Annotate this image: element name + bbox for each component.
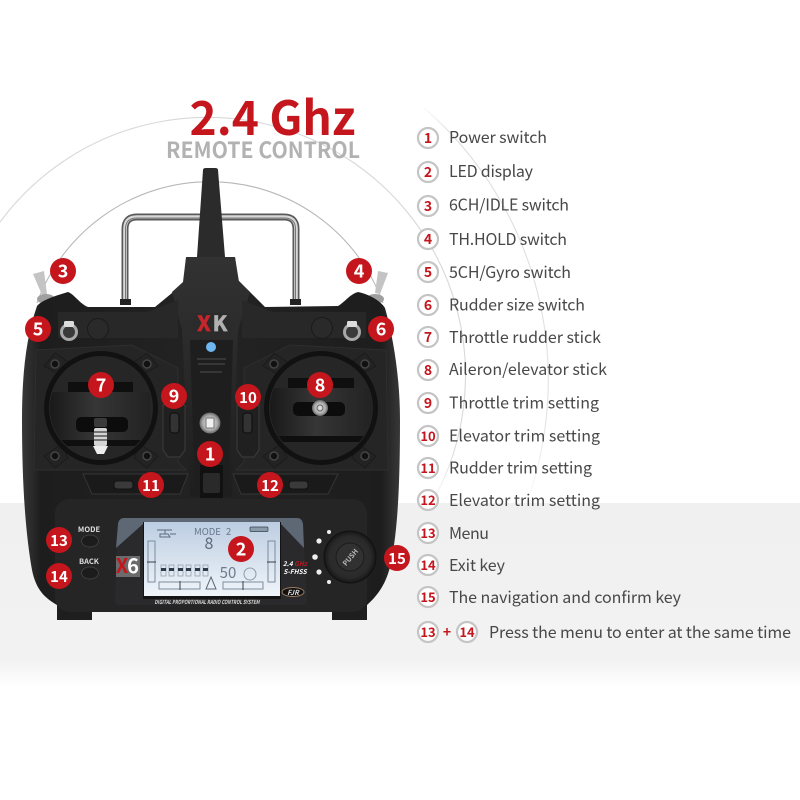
mode button: [78, 524, 100, 547]
FJR logo: FJR: [287, 588, 300, 598]
digit 8: 8: [205, 530, 214, 554]
badge 11: 11: [142, 475, 160, 496]
badge 7: [88, 372, 114, 398]
gimbal screws: [51, 360, 369, 460]
XK logo: [191, 308, 232, 338]
frequency logo: 2.4 GHz: [283, 558, 309, 568]
legend 14: Exit key: [449, 552, 506, 576]
back button: [79, 556, 100, 579]
transmitter body: [22, 257, 400, 620]
legend 2: LED display: [449, 158, 534, 182]
round buttons on deck: [88, 318, 332, 340]
legend 3: 3: [424, 196, 432, 216]
badge 10: [235, 384, 261, 410]
badge 3: [50, 258, 76, 284]
legend 6: Rudder size switch: [449, 292, 585, 316]
channel bars: [161, 565, 208, 576]
FJR logo: [282, 588, 304, 598]
panel caption: DIGITAL PROPORTIONAL RADIO CONTROL SYSTEM: [154, 598, 260, 606]
legend 12: 12: [420, 490, 436, 509]
legend 10: Elevator trim setting: [449, 422, 600, 446]
legend 4: 4: [424, 229, 432, 249]
frequency logo: [283, 558, 309, 576]
badge 12: 12: [261, 475, 279, 496]
LCD screen: [144, 522, 280, 596]
badge 11: [138, 472, 164, 498]
badge 14: [46, 563, 72, 589]
legend 8: Aileron/elevator stick: [449, 356, 607, 380]
upper deck: [58, 300, 366, 338]
X6 badge: [116, 550, 140, 579]
battery icon: [250, 527, 268, 532]
speaker grille: [197, 359, 226, 372]
background panel: grey floor band: [0, 503, 800, 687]
badge 2: [228, 536, 254, 562]
toggle switch right: [343, 321, 361, 341]
X6 badge: X: [116, 550, 129, 579]
chrome carry handle: [120, 217, 301, 303]
power LED: [206, 342, 216, 352]
navigation dial: [324, 531, 376, 583]
XK logo: K: [213, 308, 228, 338]
right toggle lever: [366, 271, 388, 304]
XK logo: X: [197, 308, 211, 338]
badge 5: 5: [33, 316, 43, 342]
power slide: [200, 465, 223, 498]
antenna: [197, 168, 225, 257]
remote control transmitter: [22, 168, 400, 620]
legend 13: Menu: [449, 520, 489, 544]
badge 10: 10: [239, 387, 257, 408]
horizontal trim slots: [83, 474, 338, 494]
legend 11: Rudder trim setting: [449, 454, 592, 478]
legend 13 + 14: 14: [459, 622, 475, 641]
badge 7: 7: [96, 372, 106, 398]
trim bars: [159, 581, 263, 590]
frequency logo: S-FHSS: [283, 566, 308, 576]
legend 1: Power switch: [449, 124, 547, 148]
shoulder panels: [34, 345, 388, 470]
numbered badges on the remote: [25, 258, 410, 589]
legend 8: 8: [424, 360, 432, 380]
legend 13 + 14: +: [443, 622, 451, 642]
badge 2: 2: [236, 536, 246, 562]
side bar gauges: [147, 541, 276, 582]
legend 5: 5: [424, 262, 432, 282]
legend 4: TH.HOLD switch: [449, 226, 567, 250]
value 50: 50: [220, 562, 236, 583]
legend 13: 13: [420, 523, 436, 542]
navigation dial: PUSH: [341, 547, 361, 568]
mode text: 2: [226, 524, 231, 538]
badge 13: [46, 527, 72, 553]
badge 8: 8: [315, 372, 325, 398]
legend 15: 15: [420, 587, 436, 606]
badge 15: [384, 545, 410, 571]
badge 13: 13: [50, 530, 68, 551]
badge 4: 4: [354, 258, 365, 284]
dial indicator dots: [312, 530, 331, 584]
decorative signal arcs: [0, 107, 548, 515]
badge 8: [307, 372, 333, 398]
right gimbal: [264, 351, 378, 465]
back button: BACK: [79, 556, 100, 567]
left toggle lever: [33, 271, 55, 304]
legend list: [418, 124, 791, 643]
title: 2.4 Ghz: 2.4 Ghz: [190, 80, 356, 149]
left gimbal: [44, 351, 158, 465]
badge 1: 1: [205, 440, 215, 466]
badge 12: [257, 472, 283, 498]
badge 1: [197, 440, 223, 467]
badge 15: 15: [388, 548, 406, 569]
badge 3: 3: [58, 258, 68, 284]
right stick knob: [312, 400, 328, 416]
badge 6: [368, 316, 394, 342]
head block: [172, 257, 250, 497]
legend 15: The navigation and confirm key: [449, 584, 682, 608]
legend 10: 10: [420, 426, 436, 445]
triangle icon: [206, 577, 216, 589]
badge 14: 14: [50, 566, 68, 587]
dial icon: [244, 568, 256, 580]
mode text: MODE: [194, 524, 221, 538]
badge 9: [161, 382, 187, 409]
toggle switch left: [60, 321, 78, 341]
mode button: MODE: [78, 524, 100, 535]
legend 5: 5CH/Gyro switch: [449, 259, 571, 283]
legend 14: 14: [420, 555, 436, 574]
lower control panel: [55, 499, 367, 612]
center strip: [190, 340, 233, 497]
legend 13 + 14: Press the menu to enter at the same time: [489, 619, 791, 643]
LCD bezel: [115, 518, 307, 605]
legend 7: 7: [424, 327, 432, 347]
legend 2: 2: [424, 162, 432, 182]
legend 9: Throttle trim setting: [449, 390, 599, 414]
power knob: [200, 412, 220, 434]
legend 3: 6CH/IDLE switch: [449, 192, 569, 216]
left stick: [93, 428, 108, 454]
badge 4: [346, 258, 372, 284]
legend 14: [418, 552, 506, 576]
legend 6: 6: [424, 295, 432, 315]
legend 1: 1: [424, 128, 432, 148]
badge 9: 9: [169, 382, 179, 408]
badge 6: 6: [376, 316, 386, 342]
legend 13: [418, 520, 489, 544]
subtitle: REMOTE CONTROL: REMOTE CONTROL: [166, 133, 360, 165]
legend 12: Elevator trim setting: [449, 487, 600, 511]
legend 7: Throttle rudder stick: [449, 324, 601, 348]
X6 badge: 6: [127, 550, 139, 579]
trim slots vertical: [163, 405, 259, 457]
legend 13 + 14: 13: [420, 622, 436, 641]
screw plates: [44, 353, 376, 468]
badge 5: [25, 316, 51, 342]
legend 11: 11: [420, 458, 436, 477]
legend 9: 9: [424, 393, 432, 413]
helicopter icon: [157, 530, 176, 537]
